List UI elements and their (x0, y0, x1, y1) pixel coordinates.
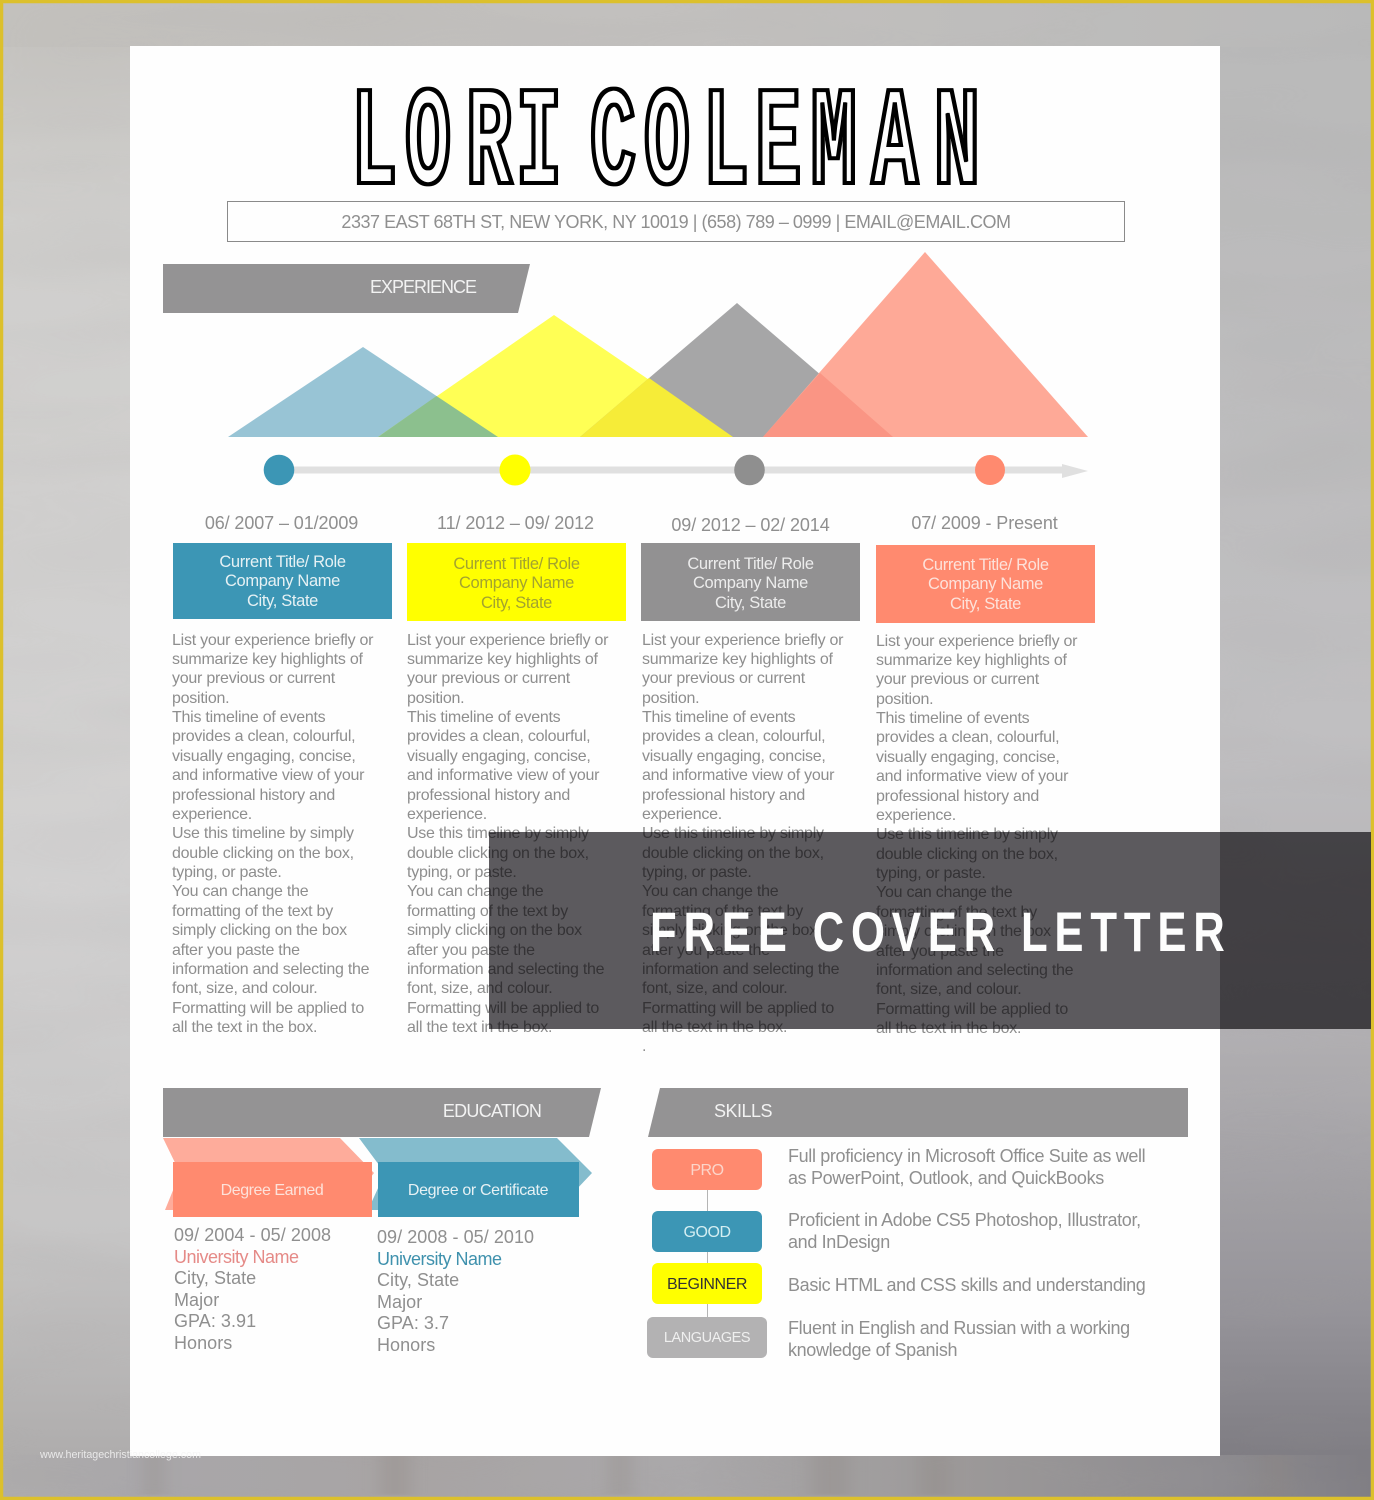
description 4: provides a clean, colourful, (876, 729, 1059, 746)
description 3: and informative view of your (642, 767, 834, 784)
description 2: List your experience briefly or (407, 632, 608, 648)
contact bar: 2337 EAST 68TH ST, NEW YORK, NY 10019 | (658) 789 – 0999 | EMAIL@EMAIL.COM (341, 212, 1011, 232)
description 4: position. (876, 691, 933, 708)
heading: education (163, 1088, 601, 1137)
heading: experience (163, 264, 530, 313)
date 1: 06/ 2007 – 01/2009 (205, 513, 358, 533)
description 3: all the text in the box. (642, 1019, 787, 1036)
description 2: simply clicking on the box (407, 922, 582, 939)
education details 2: City, State (377, 1270, 459, 1290)
role box 3: City, State (715, 594, 786, 612)
timeline arrow (279, 464, 1088, 478)
description 4: font, size, and colour. (876, 981, 1021, 998)
overlap: grey coral (763, 373, 893, 437)
role box 3 (641, 543, 860, 621)
description 4 (876, 632, 1078, 1037)
description 3 (642, 632, 844, 1055)
description 3: simply clicking on the box (642, 922, 817, 939)
skill text: beginner: Basic HTML and CSS skills and understanding (788, 1275, 1145, 1295)
description 3: This timeline of events (642, 709, 795, 726)
education ribbons (163, 1138, 592, 1217)
skill level: good: GOOD (683, 1224, 731, 1241)
description 2: You can change the (407, 883, 543, 900)
description 2: professional history and (407, 786, 570, 804)
description 3: experience. (642, 806, 722, 823)
skill level: languages (647, 1317, 767, 1358)
skill connector (707, 1188, 708, 1318)
description 1: This timeline of events (172, 709, 325, 726)
description 2: Use this timeline by simply (407, 825, 589, 842)
role box 1: Current Title/ Role (219, 553, 346, 571)
education details 2: Major (377, 1292, 422, 1312)
description 2: after you paste the (407, 942, 535, 958)
education details 1: University Name (174, 1247, 299, 1267)
peak: grey (580, 303, 893, 437)
description 4: visually engaging, concise, (876, 749, 1060, 766)
marker: coral (975, 455, 1005, 485)
description 3: your previous or current (642, 670, 805, 687)
education details 1: GPA: 3.91 (174, 1311, 256, 1331)
education details 2: 09/ 2008 - 05/ 2010 (377, 1227, 534, 1247)
description 1 (172, 632, 374, 1036)
description 2: font, size, and colour. (407, 980, 552, 997)
watermark: www.heritagechristiancollege.com (40, 1449, 201, 1461)
role box 2: Company Name (459, 574, 574, 592)
date 2: 11/ 2012 – 09/ 2012 (437, 513, 594, 533)
skill text: languages (788, 1318, 1130, 1360)
description 2 (407, 632, 608, 1036)
role box 4: City, State (950, 595, 1021, 613)
description 1: provides a clean, colourful, (172, 728, 355, 745)
resume page (130, 46, 1220, 1456)
skill level: pro (652, 1149, 762, 1190)
marker: grey (734, 455, 765, 485)
description 4: Use this timeline by simply (876, 826, 1058, 843)
education details 2: GPA: 3.7 (377, 1313, 449, 1333)
role box 3: Current Title/ Role (687, 555, 814, 573)
description 1: font, size, and colour. (172, 980, 317, 997)
role box 2 (407, 543, 626, 621)
role box 4: Current Title/ Role (922, 556, 1049, 574)
description 2: This timeline of events (407, 709, 560, 726)
description 3: provides a clean, colourful, (642, 728, 825, 745)
description 4: typing, or paste. (876, 865, 986, 882)
description 1: and informative view of your (172, 767, 364, 784)
description 1: simply clicking on the box (172, 922, 347, 939)
skill text: languages: Fluent in English and Russian with a working (788, 1318, 1130, 1338)
description 2: typing, or paste. (407, 864, 517, 881)
skill text: good: Proficient in Adobe CS5 Photoshop, Illustrator, (788, 1210, 1141, 1230)
description 4: and informative view of your (876, 768, 1068, 785)
peak: coral (763, 252, 1088, 437)
overlap: blue yellow (378, 396, 498, 437)
role box 2: City, State (481, 594, 552, 612)
overlap: yellow grey (580, 378, 733, 437)
education details 1: Honors (174, 1333, 232, 1353)
description 2: provides a clean, colourful, (407, 728, 590, 745)
skill text: languages: knowledge of Spanish (788, 1340, 957, 1360)
description 4: You can change the (876, 884, 1012, 901)
skill text: pro: as PowerPoint, Outlook, and QuickBooks (788, 1168, 1104, 1188)
skill text: pro: Full proficiency in Microsoft Office Suite as well (788, 1146, 1145, 1166)
ribbon: teal back (359, 1138, 592, 1210)
description 4: simply clicking on the box (876, 923, 1051, 940)
banner title: FREE COVER LETTER (650, 901, 1225, 963)
description 4: Formatting will be applied to (876, 1001, 1068, 1018)
description 1: all the text in the box. (172, 1019, 317, 1036)
description 3: information and selecting the (642, 961, 839, 978)
description 4: information and selecting the (876, 962, 1073, 979)
education details 1: 09/ 2004 - 05/ 2008 (174, 1225, 331, 1245)
description 4: List your experience briefly or (876, 632, 1077, 650)
description 2: position. (407, 690, 464, 707)
description 2: experience. (407, 806, 487, 823)
description 1: typing, or paste. (172, 864, 282, 881)
date 4: 07/ 2009 - Present (911, 513, 1058, 533)
date 3: 09/ 2012 – 02/ 2014 (671, 515, 830, 535)
skill level: languages: LANGUAGES (664, 1330, 750, 1346)
description 1: Formatting will be applied to (172, 1000, 364, 1017)
description 4: experience. (876, 807, 956, 824)
description 2: Formatting will be applied to (407, 1000, 599, 1017)
description 1: after you paste the (172, 942, 300, 958)
description 4: summarize key highlights of (876, 652, 1067, 669)
ribbon: coral front: Degree Earned (221, 1182, 323, 1199)
description 2: visually engaging, concise, (407, 748, 591, 765)
description 1: visually engaging, concise, (172, 748, 356, 765)
skill level: beginner: BEGINNER (667, 1276, 747, 1293)
role box 4: Company Name (928, 575, 1043, 593)
description 3: typing, or paste. (642, 864, 752, 881)
peak: yellow (378, 315, 733, 437)
marker: blue (264, 455, 294, 485)
description 1: Use this timeline by simply (172, 825, 354, 842)
description 1: your previous or current (172, 670, 335, 687)
description 4: your previous or current (876, 671, 1039, 688)
contact bar (227, 201, 1125, 242)
heading: skills (648, 1088, 1188, 1137)
heading: education: EDUCATION (443, 1101, 541, 1121)
description 4: This timeline of events (876, 710, 1029, 727)
skill level: pro: PRO (690, 1162, 724, 1179)
description 1: formatting of the text by (172, 903, 333, 920)
skill level: good (652, 1211, 762, 1252)
ribbon: coral back (163, 1138, 374, 1210)
description 3: font, size, and colour. (642, 980, 787, 997)
description 3: You can change the (642, 883, 778, 900)
mountain chart and timeline (228, 252, 1088, 486)
description 4: double clicking on the box, (876, 846, 1058, 863)
role box 1 (173, 543, 392, 619)
description 3: double clicking on the box, (642, 845, 824, 862)
description 2: information and selecting the (407, 961, 604, 978)
description 1: information and selecting the (172, 961, 369, 978)
description 2: and informative view of your (407, 767, 599, 784)
heading: experience: EXPERIENCE (370, 277, 477, 297)
description 1: experience. (172, 806, 252, 823)
skill level: beginner (652, 1263, 762, 1304)
skill text: pro (788, 1146, 1145, 1188)
description 3: after you paste the (642, 942, 770, 958)
skill text: good (788, 1210, 1141, 1252)
description 1: professional history and (172, 786, 335, 804)
description 1: double clicking on the box, (172, 845, 354, 862)
description 3: visually engaging, concise, (642, 748, 826, 765)
dark banner (489, 832, 1371, 1029)
role box 1: City, State (247, 592, 318, 610)
description 3: . (642, 1038, 646, 1055)
description 3: Use this timeline by simply (642, 825, 824, 842)
description 1: You can change the (172, 883, 308, 900)
ribbon: teal front: Degree or Certificate (408, 1182, 549, 1199)
education details 1: City, State (174, 1268, 256, 1288)
description 1: summarize key highlights of (172, 651, 363, 668)
description 3: summarize key highlights of (642, 651, 833, 668)
role box 2: Current Title/ Role (453, 555, 580, 573)
description 2: formatting of the text by (407, 903, 568, 920)
skill text: good: and InDesign (788, 1232, 890, 1252)
ribbon: coral front (173, 1162, 372, 1217)
description 3: Formatting will be applied to (642, 1000, 834, 1017)
description 2: double clicking on the box, (407, 845, 589, 862)
peak: blue (228, 347, 498, 437)
education details 2: University Name (377, 1249, 502, 1269)
role box 1: Company Name (225, 572, 340, 590)
description 1: position. (172, 690, 229, 707)
role box 4 (876, 545, 1095, 623)
description 4: after you paste the (876, 942, 1004, 960)
education details 1: Major (174, 1290, 219, 1310)
education details 1 (174, 1225, 331, 1353)
marker: yellow (500, 454, 530, 486)
description 4: all the text in the box. (876, 1020, 1021, 1037)
description 3: position. (642, 690, 699, 707)
description 4: professional history and (876, 788, 1039, 804)
description 3: formatting of the text by (642, 903, 803, 920)
description 4: formatting of the text by (876, 904, 1037, 921)
ribbon: teal front (378, 1162, 579, 1217)
description 3: List your experience briefly or (642, 632, 843, 648)
description 2: summarize key highlights of (407, 651, 598, 668)
description 2: your previous or current (407, 670, 570, 687)
heading: skills: SKILLS (714, 1101, 773, 1121)
role box 3: Company Name (693, 574, 808, 592)
education details 2: Honors (377, 1335, 435, 1355)
education details 2 (377, 1227, 534, 1355)
description 2: all the text in the box. (407, 1019, 552, 1036)
description 3: professional history and (642, 786, 805, 804)
description 1: List your experience briefly or (172, 632, 373, 648)
